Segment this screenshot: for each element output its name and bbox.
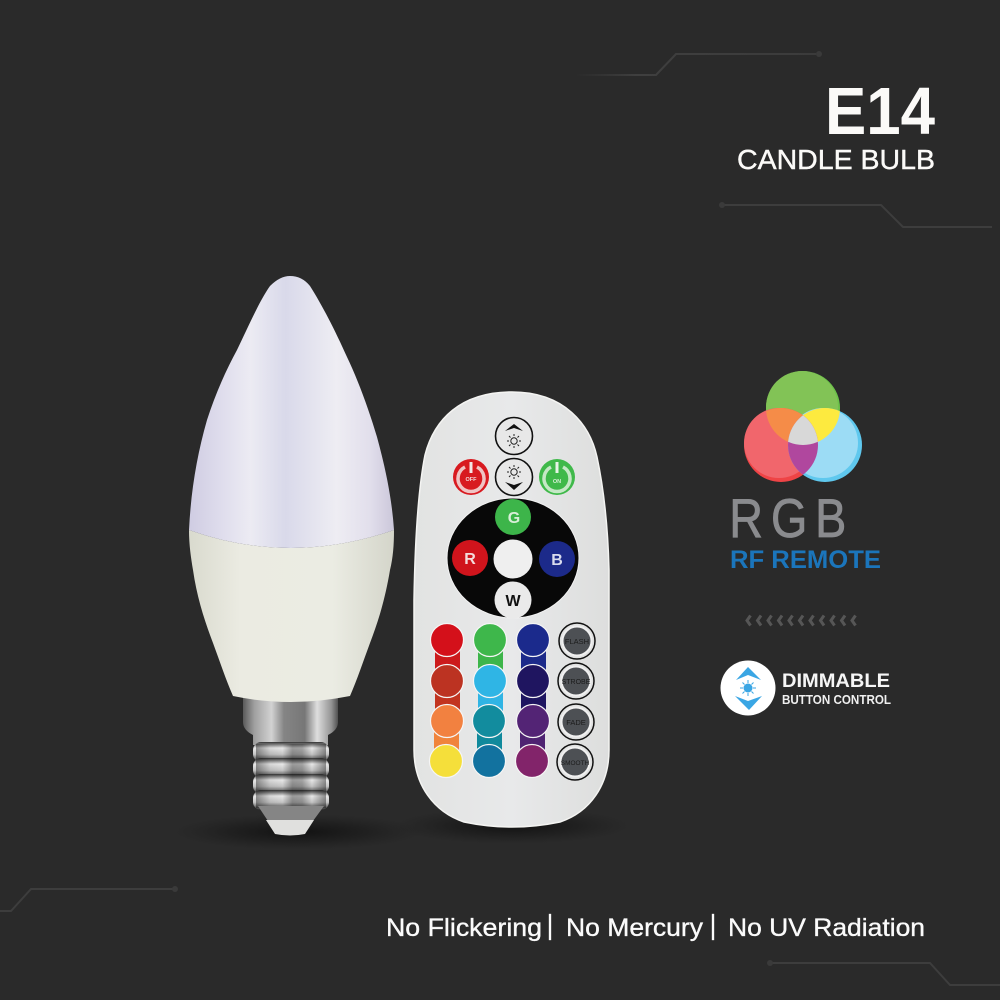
colour swatch connectors <box>434 650 546 750</box>
mode buttons: STROBE <box>562 679 591 686</box>
title: CANDLE BULB <box>737 144 935 175</box>
colour swatches <box>430 624 550 778</box>
circuit line: bottom right <box>767 960 1000 985</box>
brightness up button <box>496 418 532 454</box>
circuit line: top <box>575 51 822 75</box>
RGB label: RGB <box>729 487 846 549</box>
title: E14 <box>825 74 935 149</box>
candle bulb <box>189 276 394 836</box>
shadow under product <box>173 808 630 850</box>
feature line <box>386 914 925 942</box>
circuit line: upper right <box>719 202 992 227</box>
circuit line: bottom left <box>0 886 178 911</box>
icon: RGB colour circles <box>740 370 865 485</box>
remote control <box>414 392 609 827</box>
feature line: No Flickering <box>386 914 542 942</box>
brightness down button <box>496 458 532 496</box>
off button: OFF <box>466 477 477 483</box>
mode buttons: FLASH <box>565 637 589 646</box>
on button: ON <box>553 479 561 485</box>
colour wheel <box>447 498 579 618</box>
colour wheel: G <box>508 510 520 527</box>
feature line: No Mercury <box>566 914 704 942</box>
bulb screw base <box>243 696 338 836</box>
mode buttons: FADE <box>566 718 586 727</box>
bulb white body <box>189 530 394 702</box>
chevron divider <box>747 616 856 626</box>
dimmable label: DIMMABLE <box>782 670 890 692</box>
button control label: BUTTON CONTROL <box>782 693 891 707</box>
title <box>737 74 935 175</box>
colour wheel: R <box>464 551 476 568</box>
mode buttons: SMOOTH <box>561 760 590 767</box>
feature line: No UV Radiation <box>728 914 925 942</box>
colour wheel: W <box>505 593 521 610</box>
off button <box>453 459 489 495</box>
RF Remote label: RF REMOTE <box>730 546 881 574</box>
bulb frosted glass dome <box>189 276 394 548</box>
remote body <box>414 392 609 827</box>
icon: dimmable <box>720 660 776 716</box>
colour wheel: B <box>551 552 563 569</box>
mode buttons <box>557 623 595 780</box>
on button <box>539 459 575 495</box>
